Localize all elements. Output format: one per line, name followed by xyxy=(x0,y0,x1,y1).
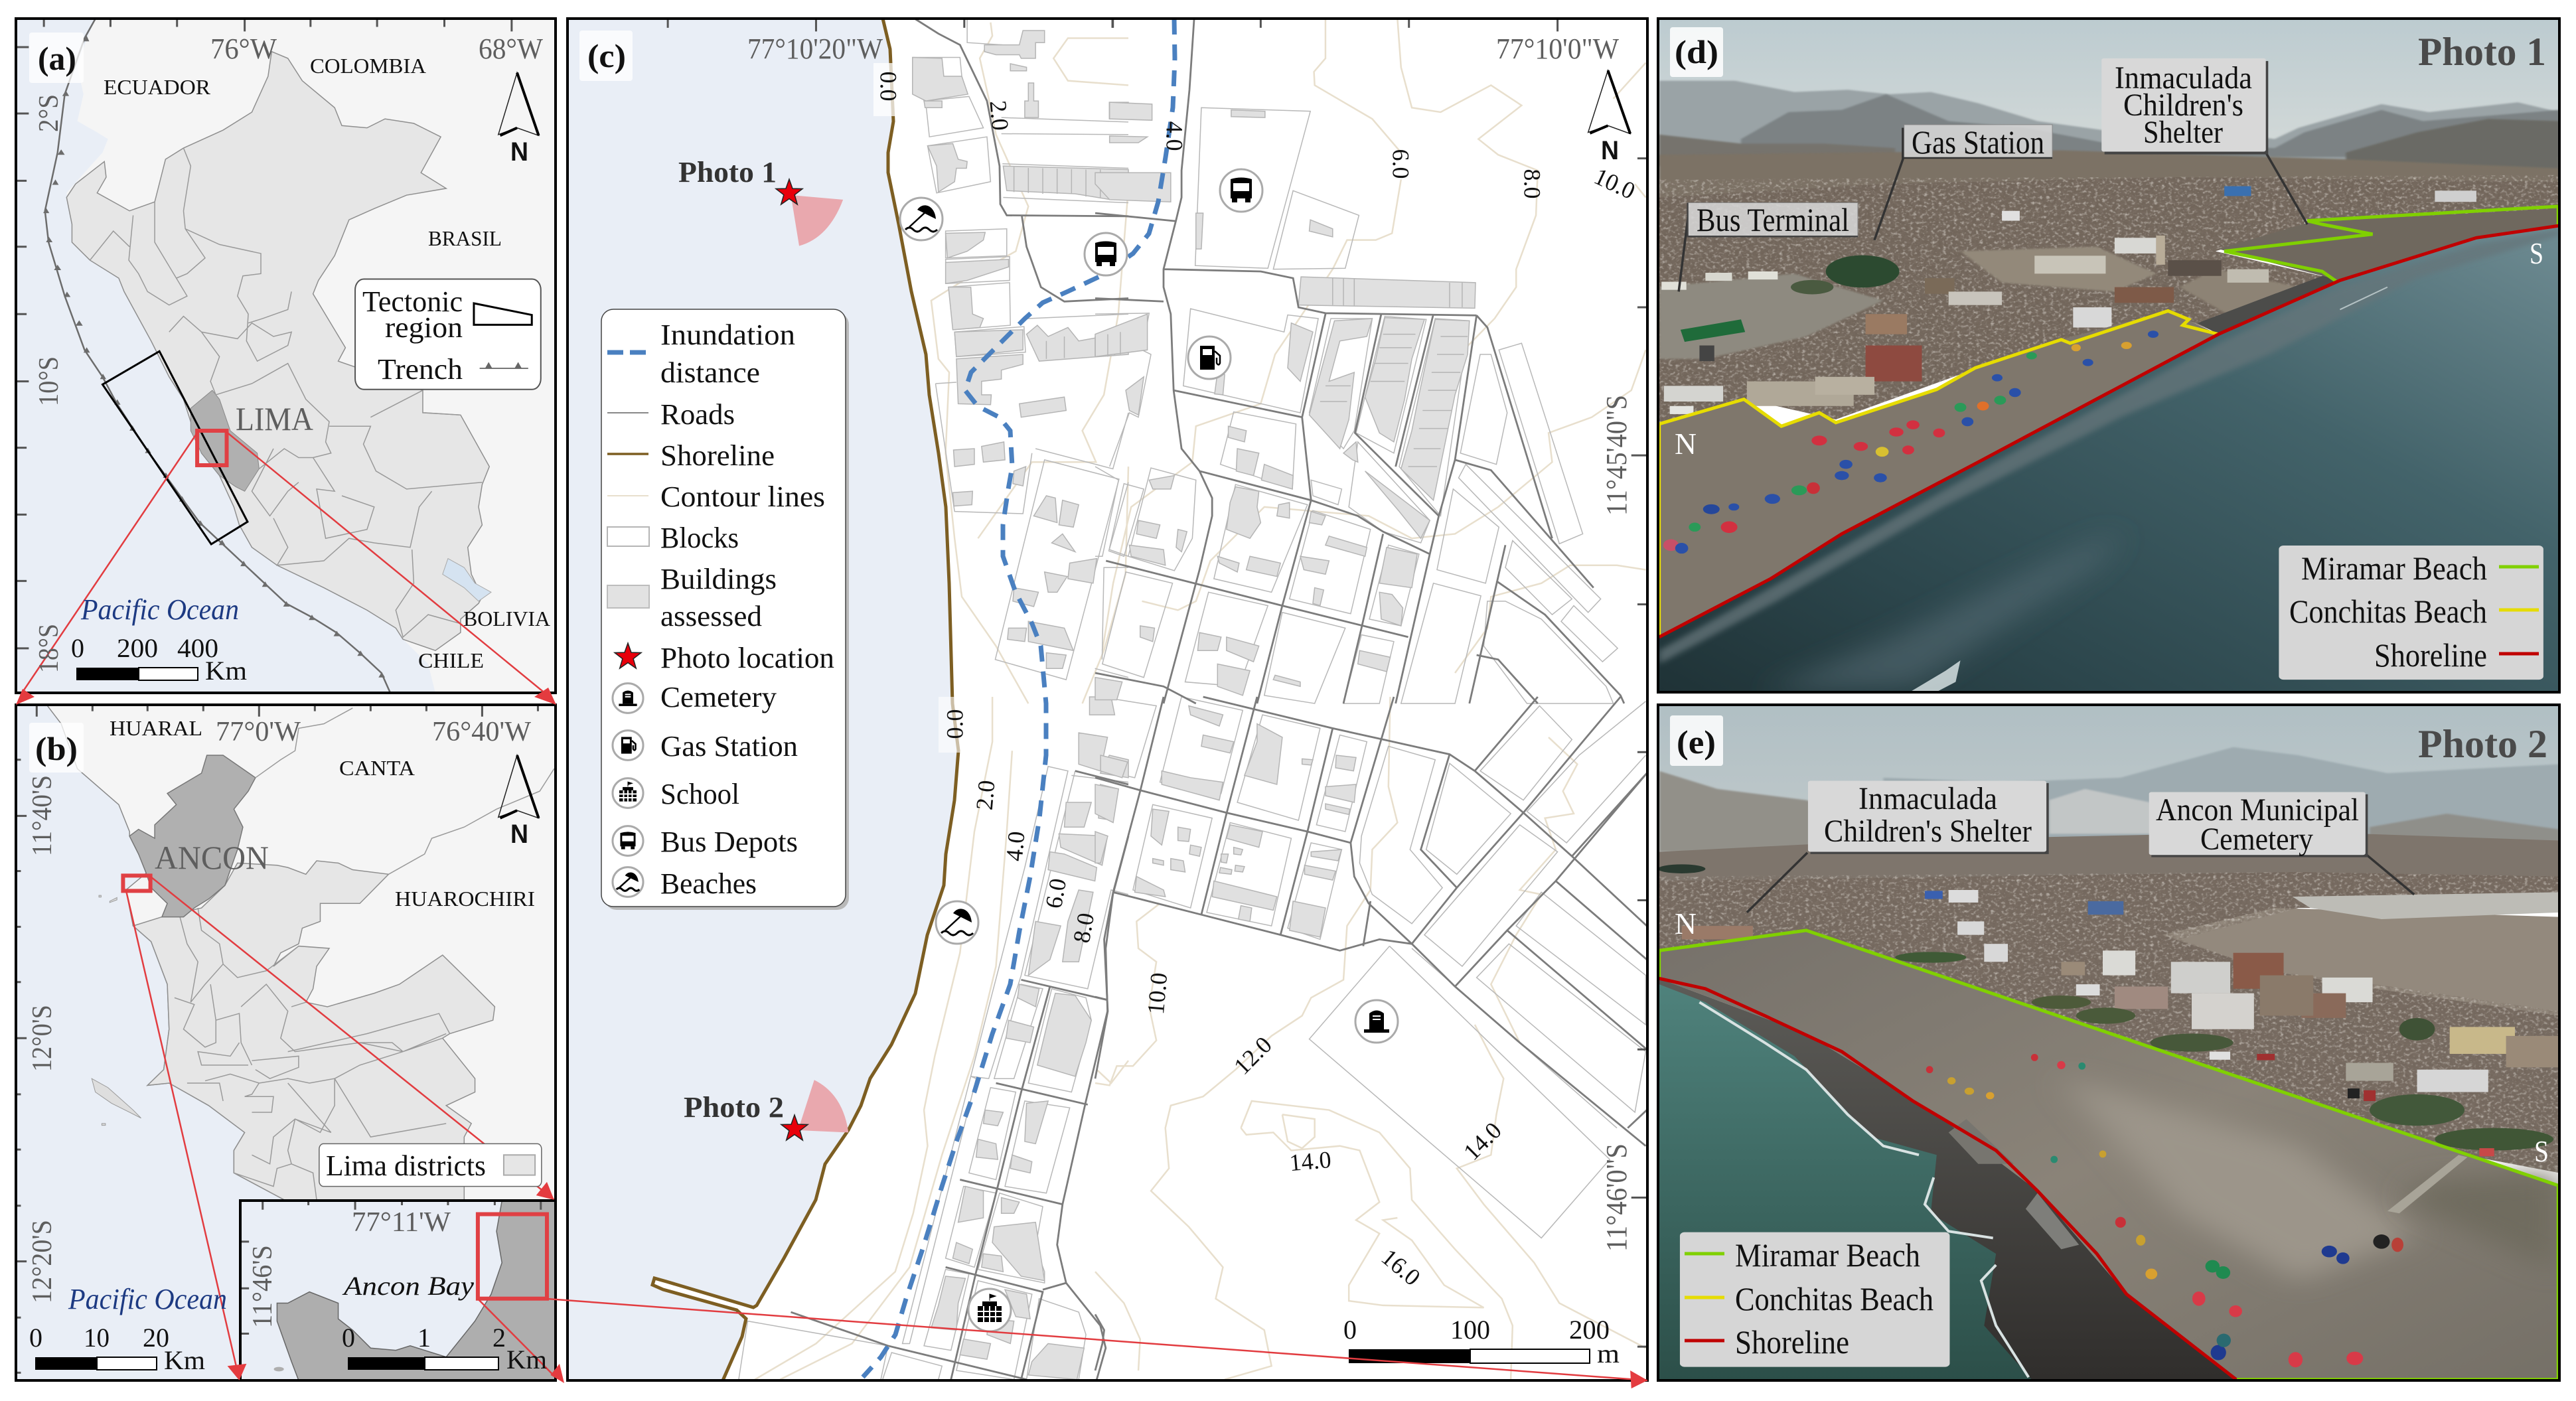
scale bar b: 10 xyxy=(84,1323,110,1353)
labels d: Photo 1 xyxy=(2418,30,2546,74)
photo 1 location: Photo 1 xyxy=(678,156,777,188)
islands xyxy=(92,895,141,1126)
legend c: distance xyxy=(660,356,760,389)
map a labels: 2°S xyxy=(34,94,64,132)
map a labels: Trench xyxy=(378,353,463,386)
sky e xyxy=(1658,703,2562,856)
label (c) xyxy=(579,31,633,81)
inset labels xyxy=(248,1207,474,1328)
plain xyxy=(1659,150,2559,291)
legend box e xyxy=(1680,1232,1949,1367)
ticks c xyxy=(668,19,1647,1347)
map a labels: Tectonic xyxy=(362,285,463,318)
label (d): (d) xyxy=(1675,33,1718,70)
town xyxy=(1659,177,2559,424)
buildings assessed xyxy=(913,31,1476,1380)
land xyxy=(46,705,556,1200)
labels d: N xyxy=(1675,427,1697,461)
map a labels: 76°W xyxy=(210,33,277,65)
shallows xyxy=(1659,229,2559,664)
Ancon zoom rectangle xyxy=(123,875,151,891)
labels e: Photo 2 xyxy=(2418,722,2547,766)
contour labels: 2.0 xyxy=(971,779,1000,811)
pointers d xyxy=(1679,128,2307,291)
pointers e xyxy=(1747,853,2414,913)
icon: bus depot 2 xyxy=(1220,169,1262,212)
contour labels: 4.0 xyxy=(1161,121,1187,151)
photo 2 location xyxy=(684,1080,848,1140)
contour labels xyxy=(873,63,1639,1291)
inset zoom rectangle xyxy=(478,1215,547,1299)
contour labels: 6.0 xyxy=(1040,876,1071,911)
legend e contents: Miramar Beach xyxy=(1735,1236,1920,1274)
scale bar b: 20 xyxy=(143,1323,169,1353)
labels e: S xyxy=(2534,1134,2549,1168)
legend c: Roads xyxy=(660,398,735,431)
cemetery patch xyxy=(2293,892,2559,919)
wet sand xyxy=(1659,978,2236,1380)
map b labels: HUAROCHIRI xyxy=(395,887,535,911)
panel c: inundation map xyxy=(568,19,1647,1380)
scale bar b: Km xyxy=(164,1345,205,1375)
inset labels: 11°46'S xyxy=(248,1245,278,1328)
contour labels: 12.0 xyxy=(1229,1031,1277,1080)
map a labels: BOLIVIA xyxy=(463,607,550,630)
map a labels xyxy=(34,33,550,673)
legend a xyxy=(355,279,541,390)
icon: cemetery xyxy=(1355,1000,1398,1043)
seawall xyxy=(2198,273,2341,334)
contour labels: 10.0 xyxy=(1142,972,1172,1015)
sea e xyxy=(1659,984,2032,1380)
contour labels: 14.0 xyxy=(1458,1117,1507,1165)
ticks b xyxy=(16,705,538,1372)
map b labels: Lima districts xyxy=(326,1149,486,1182)
north arrow c: N xyxy=(1601,136,1619,165)
blocks xyxy=(739,19,1645,1380)
label (b): (b) xyxy=(35,730,78,767)
legend d contents: Shoreline xyxy=(2374,636,2487,674)
icon: gas station xyxy=(1188,336,1231,379)
Peru internal boundaries xyxy=(90,148,482,637)
label (e): (e) xyxy=(1677,723,1716,761)
map a labels: BRASIL xyxy=(428,226,502,250)
panel d: Photo 1 aerial xyxy=(1658,18,2562,693)
scale bar inset xyxy=(342,1323,547,1374)
labels d: Children's xyxy=(2123,88,2243,123)
map a labels: Pacific Ocean xyxy=(80,593,239,626)
label (e) xyxy=(1670,715,1723,766)
label (a) xyxy=(29,33,84,83)
foam e xyxy=(1699,1002,2028,1377)
map b labels: 77°0'W xyxy=(216,717,301,747)
map b labels: CANTA xyxy=(339,756,415,780)
buildings e xyxy=(1658,864,2558,1150)
trees xyxy=(1826,256,1900,287)
label boxes e xyxy=(1808,781,2368,857)
legend c: Blocks xyxy=(660,522,739,554)
map a labels: N xyxy=(510,137,528,167)
label (a): (a) xyxy=(38,40,76,77)
label boxes d xyxy=(1688,58,2268,236)
scale bar inset: Km xyxy=(506,1345,547,1374)
zoom leader lines b xyxy=(126,877,554,1380)
scale bar c xyxy=(1343,1315,1620,1368)
coordinates c xyxy=(747,33,1633,1252)
legend b xyxy=(319,1143,542,1187)
labels d: S xyxy=(2530,236,2543,270)
far mountains e xyxy=(1883,747,2559,841)
icon: bus depot 1 xyxy=(1085,233,1127,275)
mountains near xyxy=(1741,94,2559,157)
boundary: Conchitas xyxy=(1659,311,2218,637)
legend c: Bus Depots xyxy=(660,826,798,858)
map a labels: LIMA xyxy=(236,400,313,437)
coordinates c: 77°10'20"W xyxy=(747,33,883,65)
map b labels: 11°40'S xyxy=(27,775,58,856)
panel e: Photo 2 aerial xyxy=(1658,703,2562,1380)
labels d: Bus Terminal xyxy=(1697,201,1849,238)
Lake Titicaca xyxy=(443,559,491,601)
scale bar b xyxy=(29,1323,205,1375)
Peru xyxy=(66,52,489,650)
legend c: Cemetery xyxy=(660,681,777,713)
label (c): (c) xyxy=(587,37,626,74)
roads xyxy=(791,19,1647,1380)
plain e xyxy=(1659,832,2559,890)
panel b frame xyxy=(16,705,556,1380)
zoom leader from inset to panel c xyxy=(16,688,1647,1388)
legend e contents xyxy=(1685,1236,1933,1361)
panel d frame xyxy=(1658,19,2559,692)
foam xyxy=(1912,660,1961,692)
province boundaries xyxy=(256,708,554,874)
contour labels: 8.0 xyxy=(1519,169,1545,199)
scale bar c: 200 xyxy=(1569,1315,1610,1345)
map a labels: ECUADOR xyxy=(104,75,211,99)
labels e: N xyxy=(1675,907,1697,940)
sea xyxy=(1659,226,2559,693)
umbrellas e xyxy=(1926,1052,2494,1367)
photo 2 location: Photo 2 xyxy=(684,1091,784,1124)
contour labels: 6.0 xyxy=(1387,149,1414,179)
Ancon district xyxy=(129,755,256,917)
desert e xyxy=(2162,908,2559,1015)
scale bar inset: 0 xyxy=(342,1323,355,1353)
mountains far xyxy=(1659,81,2559,179)
map b labels: 76°40'W xyxy=(432,717,531,747)
inset land xyxy=(277,1201,556,1380)
map b labels: Pacific Ocean xyxy=(68,1283,227,1315)
legend c: School xyxy=(660,778,739,810)
labels e: Children's Shelter xyxy=(1824,814,2032,849)
inset labels: 77°11'W xyxy=(352,1207,451,1238)
labels d: Gas Station xyxy=(1912,123,2044,161)
Lima zoom rectangle xyxy=(197,431,227,465)
north arrow a xyxy=(498,73,539,135)
parking and dusty patches xyxy=(1659,247,2299,359)
contour labels: 0.0 xyxy=(942,709,968,739)
label (d) xyxy=(1670,27,1723,77)
umbrellas xyxy=(1663,331,2159,553)
coordinates c: 11°45'40"S xyxy=(1600,395,1633,516)
groyne xyxy=(2026,1193,2079,1249)
scale bar a: 0 xyxy=(71,633,84,663)
beach xyxy=(1659,311,2218,637)
contour labels: 14.0 xyxy=(1288,1146,1332,1176)
labels e xyxy=(1675,722,2549,1168)
scale bar a: Km xyxy=(205,656,247,686)
map a labels: 10°S xyxy=(34,356,64,406)
map b labels xyxy=(27,716,535,1315)
districts xyxy=(133,861,494,1200)
icon: beach north xyxy=(900,198,943,240)
contour labels: 4.0 xyxy=(1001,830,1029,862)
contour labels: 0.0 xyxy=(875,72,901,101)
ticks inset xyxy=(240,1201,541,1334)
contour labels: 16.0 xyxy=(1377,1244,1426,1291)
legend d contents xyxy=(2289,550,2539,674)
Tectonic region box xyxy=(102,351,248,544)
legend c xyxy=(601,309,849,910)
legend d contents: Conchitas Beach xyxy=(2289,593,2487,630)
icon: beach south xyxy=(936,901,978,944)
map b labels: 12°20'S xyxy=(27,1220,58,1303)
contour labels: 2.0 xyxy=(985,100,1014,131)
beach e xyxy=(1659,930,2558,1380)
inset leader line xyxy=(479,1299,558,1380)
ticks a xyxy=(16,19,512,648)
beach light xyxy=(2061,1078,2417,1281)
sky xyxy=(1658,18,2562,171)
legend e contents: Conchitas Beach xyxy=(1735,1280,1933,1317)
Lima region xyxy=(190,390,259,491)
map a labels: CHILE xyxy=(418,648,484,672)
labels e: Cemetery xyxy=(2200,822,2313,857)
scale bar a: 200 xyxy=(117,633,158,663)
map a labels: 68°W xyxy=(479,33,543,65)
label (b) xyxy=(29,723,84,773)
neighbouring countries land xyxy=(66,19,556,693)
legend c: Shoreline xyxy=(660,439,775,472)
inundation distance line xyxy=(863,19,1175,1377)
north arrow c xyxy=(1588,70,1630,165)
scale bar a: 400 xyxy=(177,633,218,663)
legend c: Beaches xyxy=(660,867,757,900)
legend c: assessed xyxy=(660,600,762,632)
town e xyxy=(1659,872,2559,1173)
map a labels: 18°S xyxy=(34,624,64,673)
coordinates c: 11°46'0"S xyxy=(1600,1143,1633,1252)
coordinates c: 77°10'0"W xyxy=(1496,33,1619,65)
legend c: Gas Station xyxy=(660,730,798,763)
contour labels: 8.0 xyxy=(1068,911,1099,945)
labels d: Inmaculada xyxy=(2115,60,2252,96)
labels d xyxy=(1675,30,2546,461)
labels d: Shelter xyxy=(2143,115,2223,150)
district boundaries xyxy=(175,908,450,1200)
path e xyxy=(2387,1155,2467,1213)
buildings and vehicles xyxy=(1661,186,2476,414)
Trench line xyxy=(43,19,390,693)
legend d contents: Miramar Beach xyxy=(2301,550,2487,587)
map a labels: COLOMBIA xyxy=(310,54,426,78)
icon: school xyxy=(968,1289,1011,1331)
scale bar c: 0 xyxy=(1343,1315,1357,1345)
labels e: Inmaculada xyxy=(1858,781,1997,816)
shoreline e xyxy=(1659,978,2236,1380)
contour lines xyxy=(755,19,1645,1380)
shoreline xyxy=(652,19,958,1380)
panel a: Peru map xyxy=(16,19,556,702)
scale bar inset: 2 xyxy=(492,1323,506,1353)
map b labels: 12°0'S xyxy=(27,1005,58,1072)
north arrow b xyxy=(498,755,539,818)
legend e contents: Shoreline xyxy=(1735,1323,1849,1361)
contour labels: 10.0 xyxy=(1590,163,1639,204)
scale bar a xyxy=(71,633,247,686)
scale bar c: 100 xyxy=(1450,1315,1490,1345)
panel a frame xyxy=(16,19,556,693)
scale bar c: m xyxy=(1597,1339,1620,1368)
legend c: Photo location xyxy=(660,642,834,674)
panel e frame xyxy=(1658,705,2559,1380)
scale bar inset: 1 xyxy=(417,1323,431,1353)
legend c: Contour lines xyxy=(660,480,825,513)
legend c: Buildings xyxy=(660,563,777,595)
legend c: Inundation xyxy=(660,319,795,351)
labels e: Ancon Municipal xyxy=(2156,792,2359,828)
map b labels: ANCON xyxy=(155,839,269,876)
zoom leader lines xyxy=(17,431,556,702)
boundary: Miramar xyxy=(2224,206,2558,282)
sea xyxy=(568,19,958,1380)
panel b: Lima districts map xyxy=(16,705,558,1380)
map b labels: N xyxy=(510,820,528,849)
map a labels: region xyxy=(385,311,463,344)
shoreline d xyxy=(1659,226,2559,637)
inset: Ancon Bay xyxy=(240,1201,558,1380)
panel c frame xyxy=(568,19,1647,1380)
legend box d xyxy=(2279,546,2543,680)
scale bar b: 0 xyxy=(29,1323,42,1353)
photo 1 location xyxy=(678,156,843,246)
boundary: Miramar e xyxy=(1659,930,2558,1380)
inset labels: Ancon Bay xyxy=(342,1271,474,1301)
inset frame xyxy=(240,1201,556,1380)
map b labels: HUARAL xyxy=(110,716,202,740)
